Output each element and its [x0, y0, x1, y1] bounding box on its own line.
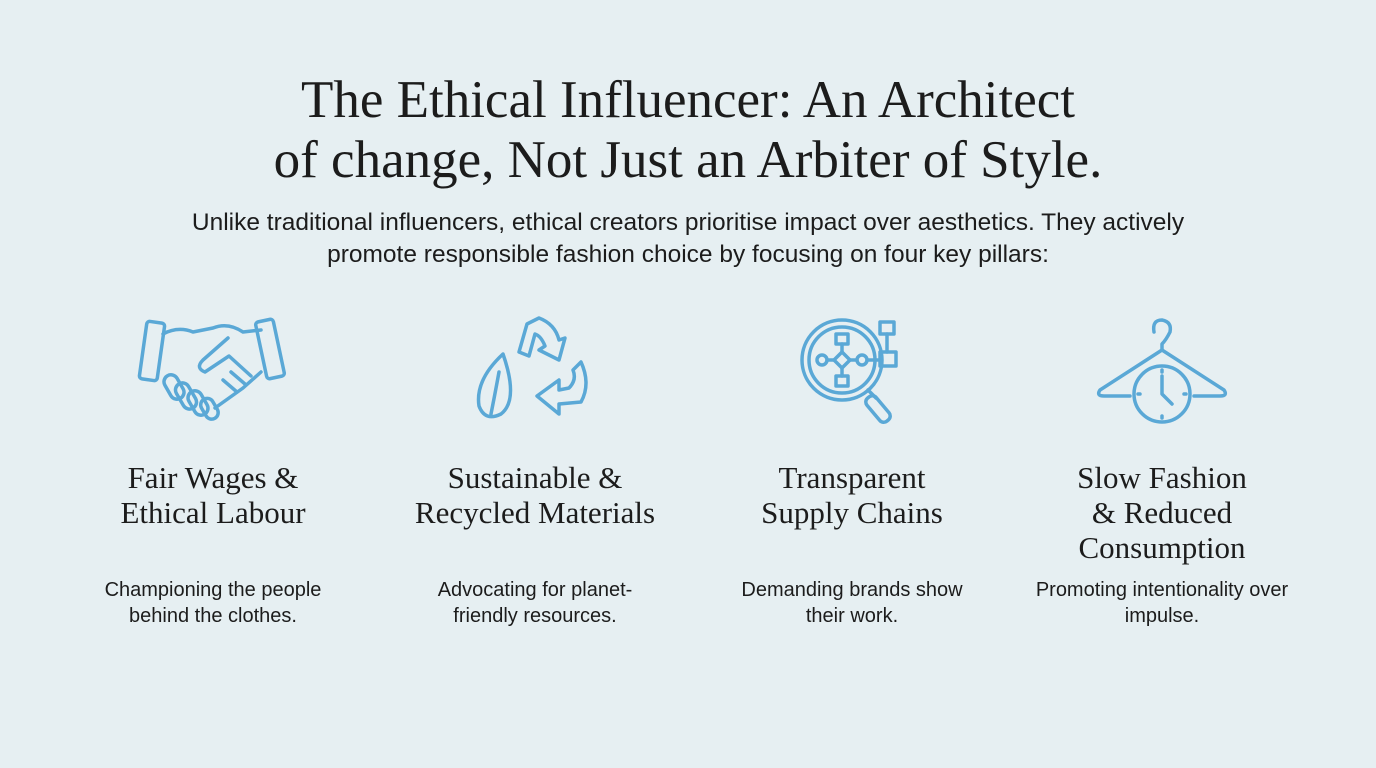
subtitle — [192, 209, 1184, 268]
heading — [761, 460, 943, 530]
subtitle: promote responsible fashion choice by focusing on four key pillars: — [327, 241, 1049, 268]
heading — [120, 460, 306, 530]
icon: hanger with clock — [1096, 318, 1228, 424]
heading: Fair Wages & — [128, 460, 298, 495]
title: The Ethical Influencer: An Architect — [301, 71, 1075, 129]
title — [274, 71, 1102, 189]
description: Demanding brands show — [741, 579, 963, 601]
description: Championing the people — [105, 579, 321, 601]
description — [438, 579, 632, 627]
heading — [415, 460, 655, 530]
icon: recycle leaf — [476, 316, 588, 418]
heading: & Reduced — [1092, 495, 1232, 530]
heading: Slow Fashion — [1077, 460, 1247, 495]
icon: handshake — [138, 318, 286, 421]
subtitle: Unlike traditional influencers, ethical creators prioritise impact over aesthetics. They actively — [192, 209, 1184, 236]
heading: Sustainable & — [448, 460, 622, 495]
description: behind the clothes. — [129, 605, 297, 627]
panel: fair wages — [105, 318, 321, 627]
description — [741, 579, 963, 627]
description — [105, 579, 321, 627]
description: impulse. — [1125, 605, 1199, 627]
title: of change, Not Just an Arbiter of Style. — [274, 131, 1102, 189]
heading — [1077, 460, 1247, 565]
heading: Recycled Materials — [415, 495, 655, 530]
heading: Consumption — [1078, 530, 1246, 565]
heading: Transparent — [779, 460, 925, 495]
icon: magnifier with flow chart — [800, 318, 898, 424]
panel: slow fashion — [1036, 318, 1288, 627]
description: friendly resources. — [453, 605, 617, 627]
description — [1036, 579, 1288, 627]
heading: Supply Chains — [761, 495, 943, 530]
description: their work. — [806, 605, 898, 627]
description: Advocating for planet- — [438, 579, 632, 601]
panel: sustainable materials — [415, 316, 655, 627]
heading: Ethical Labour — [120, 495, 306, 530]
description: Promoting intentionality over — [1036, 579, 1288, 601]
panel: transparent supply — [741, 318, 963, 627]
